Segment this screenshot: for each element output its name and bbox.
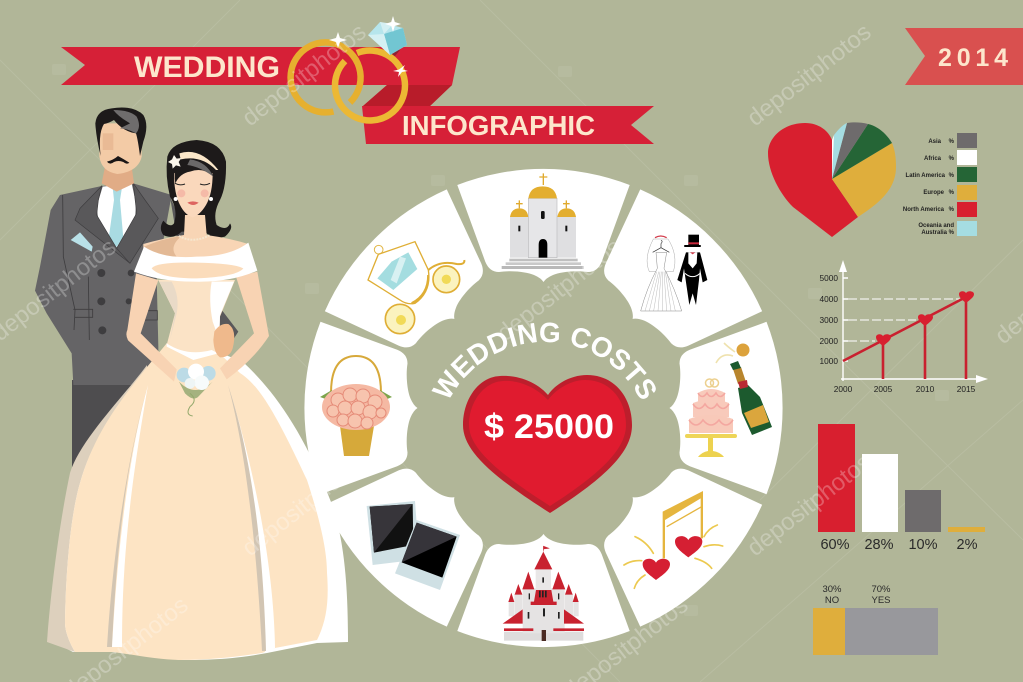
icon: musical note with hearts xyxy=(624,491,723,588)
legend: regions: Europe xyxy=(923,190,945,196)
bride xyxy=(47,140,348,660)
legend: regions: % xyxy=(949,139,955,145)
segment: church xyxy=(457,169,630,282)
icon: carriage xyxy=(368,242,464,334)
chart: bar chart: 28% xyxy=(864,537,894,553)
icon: castle xyxy=(503,546,584,641)
amount: $ 25000 xyxy=(484,408,614,446)
hair flower xyxy=(168,155,181,169)
chart: line chart: 4000 xyxy=(820,294,838,304)
chart: yes no bar: YES xyxy=(871,595,891,606)
necklace xyxy=(179,235,210,240)
chart: line chart: 2000 xyxy=(820,336,838,346)
icon: instant photos xyxy=(367,501,460,590)
chart: line chart: 3000 xyxy=(820,315,838,325)
legend: regions: Africa xyxy=(924,156,942,162)
legend: regions: Oceania and xyxy=(918,223,954,229)
jacket buttons xyxy=(97,269,134,334)
banner: infographic xyxy=(362,106,654,144)
watermark: depositphotos xyxy=(492,233,626,347)
segment: carriage xyxy=(313,178,515,380)
legend: regions: % xyxy=(949,173,955,179)
chart: line chart: 2000 xyxy=(834,384,853,394)
segment: cake and champagne xyxy=(670,322,783,494)
wheel: wedding costs xyxy=(304,168,783,648)
groom trousers xyxy=(72,380,160,470)
bride back hair xyxy=(161,140,231,238)
groom hand xyxy=(213,324,234,357)
groom shirt and tie xyxy=(97,183,136,248)
icon: champagne bottle xyxy=(716,343,772,435)
pie: africa xyxy=(832,135,834,179)
groom jacket xyxy=(35,183,172,385)
bride arms xyxy=(126,272,269,382)
chart: bar chart: 10% xyxy=(908,537,938,553)
chart: line chart: 2015 xyxy=(957,384,976,394)
center heart xyxy=(463,375,632,513)
legend: regions: Latin America xyxy=(906,173,946,179)
watermark: depositphotos xyxy=(742,448,876,562)
pie: north america xyxy=(768,123,858,237)
wedding gown skirt xyxy=(47,343,348,660)
groom head xyxy=(95,107,146,192)
off-shoulder collar xyxy=(134,243,257,282)
chart: line chart: 2010 xyxy=(916,384,935,394)
legend: regions: Australia % xyxy=(921,230,955,236)
pie: latin america xyxy=(832,124,892,179)
bride neck and shoulders xyxy=(143,215,248,267)
chart: line chart: 5000 xyxy=(820,273,838,283)
watermark: depositphotos xyxy=(237,448,371,562)
segment: castle xyxy=(457,534,630,647)
watermark: depositphotos xyxy=(742,18,876,132)
curved heading: wedding costs: WEDDING COSTS xyxy=(432,322,656,399)
pie: oceania and australia xyxy=(832,123,847,179)
chart: yes no bar xyxy=(813,584,938,655)
chart: bar chart: 60% xyxy=(820,537,850,553)
groom sleeve xyxy=(170,197,238,338)
pie: asia xyxy=(832,122,868,179)
chart: yes no bar: NO xyxy=(825,595,839,606)
legend: regions: % xyxy=(949,207,955,213)
legend: regions: % xyxy=(949,190,955,196)
segment: attire xyxy=(572,178,774,380)
legend: regions: Asia xyxy=(928,139,942,145)
chart: line chart: 1000 xyxy=(820,356,838,366)
year: 2014 xyxy=(938,44,1010,72)
icon: church xyxy=(502,173,584,269)
chart: heart pie xyxy=(768,122,896,237)
icon: wedding cake xyxy=(685,379,737,457)
banner text: wedding: WEDDING xyxy=(134,51,280,84)
chart: yes no bar: 30% xyxy=(822,584,842,595)
icon: flower basket xyxy=(320,356,392,456)
icon: bridal gown and tuxedo xyxy=(641,235,707,311)
chart: bar chart: 2% xyxy=(957,537,978,553)
bouquet xyxy=(177,364,216,416)
pie: europe xyxy=(832,143,896,217)
bodice xyxy=(158,280,235,360)
year flag xyxy=(905,28,1023,85)
groom xyxy=(35,107,238,470)
icon: wedding rings xyxy=(291,16,408,120)
legend: regions: North America xyxy=(903,207,945,213)
segment: music xyxy=(572,436,774,638)
chart: bar chart xyxy=(818,424,985,553)
chart: line chart: 2005 xyxy=(874,384,893,394)
segment: photographs xyxy=(313,436,515,638)
pocket square xyxy=(71,232,93,252)
legend: regions: % xyxy=(949,156,955,162)
bride face xyxy=(174,150,218,217)
watermark: depositphotos xyxy=(237,18,371,132)
chart: line chart xyxy=(820,260,988,394)
groom lapels xyxy=(75,183,158,263)
chart: yes no bar: 70% xyxy=(871,584,891,595)
icon: diamond xyxy=(368,22,407,56)
banner text: infographic: INFOGRAPHIC xyxy=(402,110,595,141)
banner: wedding xyxy=(61,47,460,106)
legend: regions xyxy=(903,133,977,236)
segment: flower basket xyxy=(304,322,418,494)
